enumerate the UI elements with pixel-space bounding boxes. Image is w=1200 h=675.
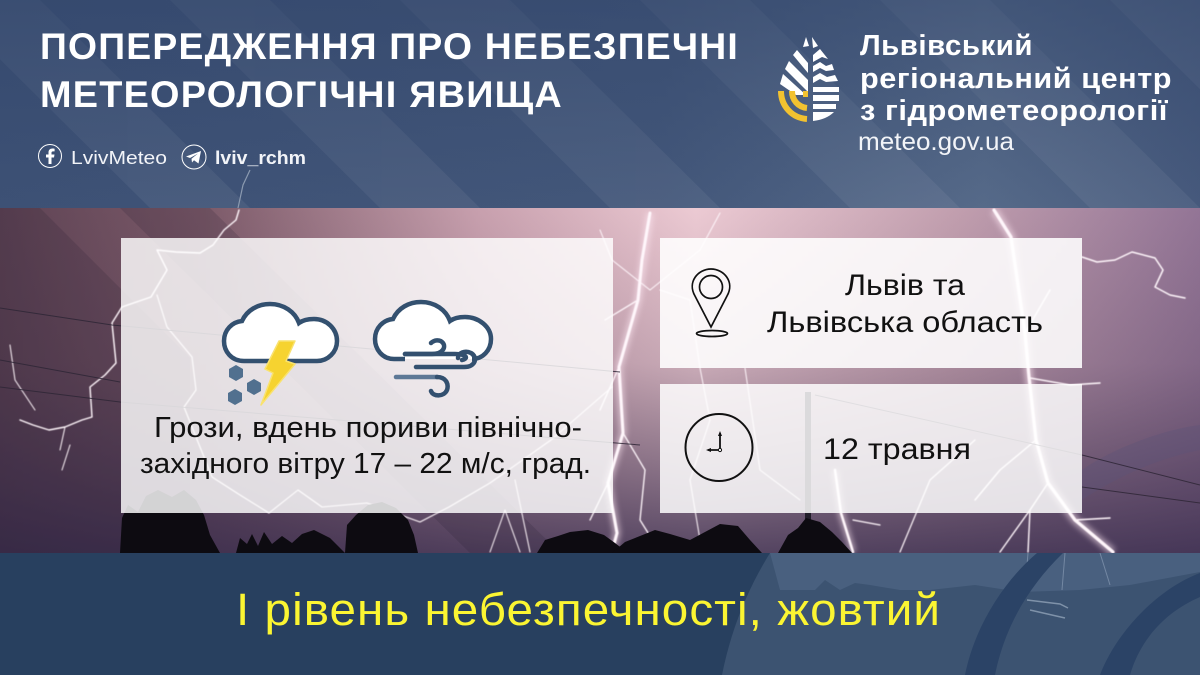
warning level: І рівень небезпечності, жовтий bbox=[236, 584, 941, 635]
title: ПОПЕРЕДЖЕННЯ ПРО НЕБЕЗПЕЧНІ bbox=[40, 26, 739, 67]
text: conditions description: Грози, вдень пориви північно- bbox=[154, 412, 582, 444]
pole bbox=[805, 392, 811, 520]
icon: thunderstorm cloud with hail bbox=[224, 304, 337, 405]
text: facebook handle: LvivMeteo bbox=[71, 148, 167, 168]
lightning bolts bbox=[10, 210, 1185, 552]
icon: telegram bbox=[182, 145, 206, 169]
icon: facebook bbox=[38, 144, 62, 168]
tree silhouettes bbox=[120, 490, 852, 553]
header background with diagonal stripes bbox=[0, 0, 1200, 208]
panel: date bbox=[660, 384, 1082, 513]
dark arch bands bbox=[965, 553, 1063, 675]
social links bbox=[38, 144, 306, 169]
text: location bbox=[767, 269, 1043, 339]
lighter arch region bbox=[722, 553, 1200, 675]
logo: organisation name: з гідрометеорології bbox=[860, 95, 1168, 127]
logo: water drop emblem bbox=[780, 37, 839, 121]
logo: organisation name bbox=[858, 30, 1172, 156]
icon: clock bbox=[686, 414, 752, 481]
storm photo band bbox=[0, 208, 1200, 553]
icon: map pin bbox=[692, 269, 730, 336]
text: date: 12 травня bbox=[823, 433, 971, 466]
logo: organisation name: meteo.gov.ua bbox=[858, 128, 1014, 156]
text: location: Львів та bbox=[845, 269, 965, 302]
diagonal stripes over photo bbox=[0, 208, 560, 553]
logo: organisation name: регіональний центр bbox=[860, 63, 1172, 95]
sky seen through footer bbox=[770, 553, 1200, 592]
text: telegram handle: lviv_rchm bbox=[215, 148, 306, 168]
text: conditions description: західного вітру 17 – 22 м/с, град. bbox=[140, 448, 591, 480]
logo: organisation name: Львівський bbox=[860, 30, 1033, 62]
text: location: Львівська область bbox=[767, 306, 1043, 339]
title bbox=[40, 26, 739, 115]
lightning glow bbox=[608, 210, 1113, 552]
power lines bbox=[0, 308, 1200, 503]
arc overlay right bbox=[1142, 428, 1183, 440]
icon: windy cloud bbox=[375, 302, 491, 395]
panel: location bbox=[660, 238, 1082, 368]
title: МЕТЕОРОЛОГІЧНІ ЯВИЩА bbox=[40, 74, 563, 115]
panel: weather conditions bbox=[121, 238, 613, 513]
text: conditions description bbox=[140, 412, 591, 480]
footer band bbox=[0, 553, 1200, 675]
